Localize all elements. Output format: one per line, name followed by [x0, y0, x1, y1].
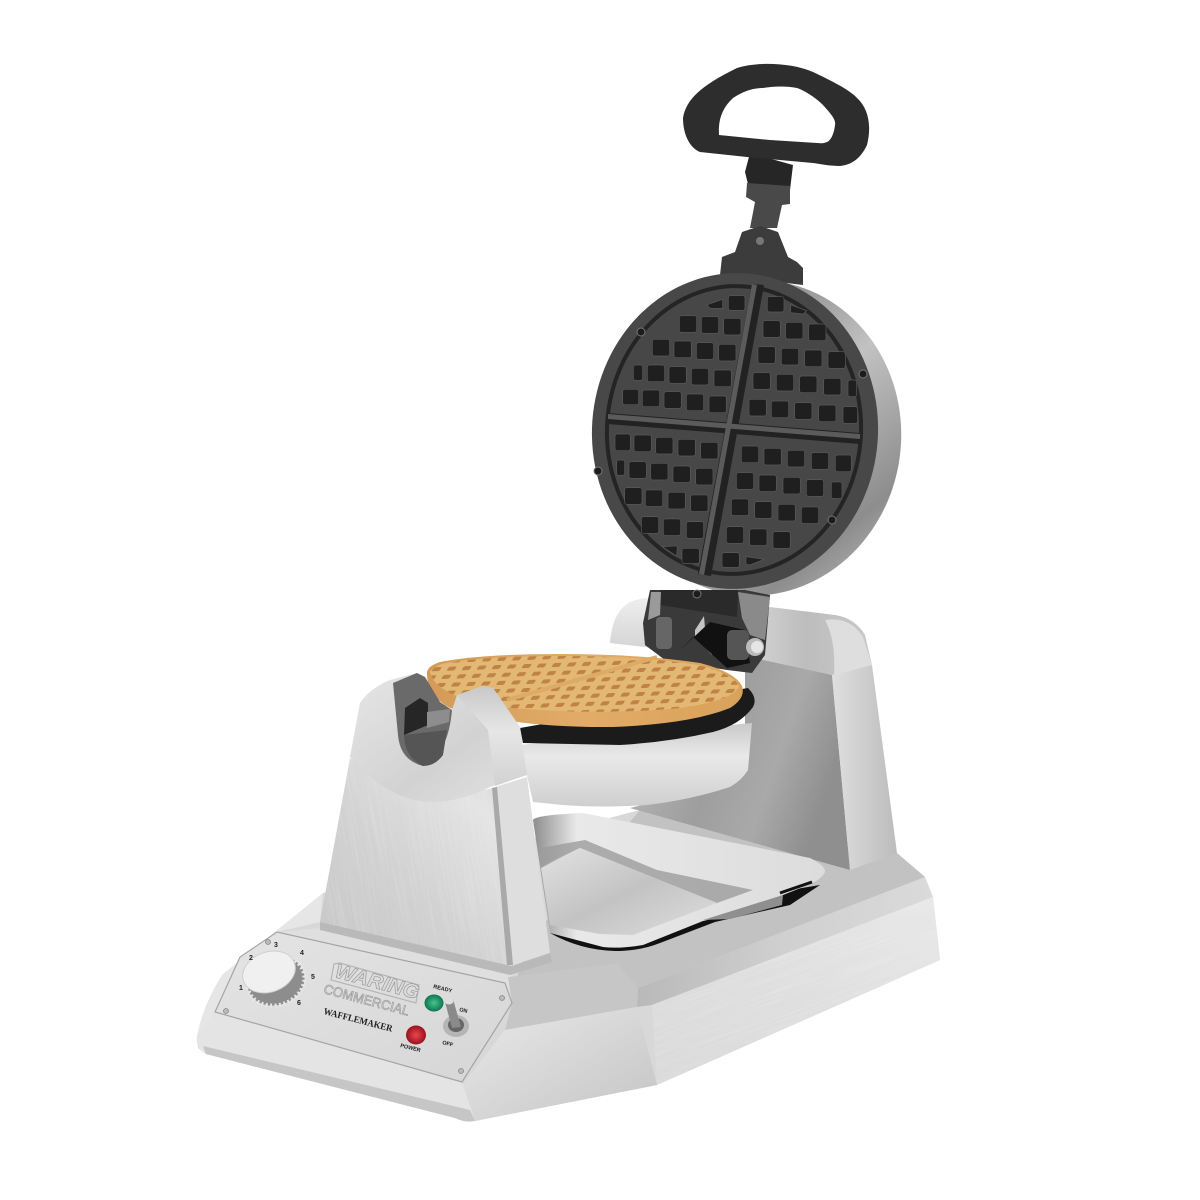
drip tray [533, 813, 825, 951]
handle neck [745, 153, 793, 190]
left tower base strip [320, 922, 552, 975]
tray inner wall [540, 840, 753, 903]
cross ribs [608, 284, 860, 576]
waffle top [430, 656, 739, 712]
dial numbers: 2 [249, 955, 253, 962]
lower cooking pan [520, 688, 755, 806]
power label: POWER [400, 1043, 421, 1054]
right tower side face [832, 665, 897, 870]
base front lip [197, 1012, 475, 1122]
COMMERCIAL wordmark: COMMERCIAL [322, 981, 412, 1019]
right tower cap [740, 606, 872, 675]
logo frame [331, 963, 419, 1003]
dial numbers: 5 [311, 974, 315, 981]
waffle [427, 654, 743, 727]
left tower lower face [320, 758, 507, 965]
left tower side face [492, 777, 550, 966]
pan rim [520, 688, 755, 745]
dial numbers [239, 942, 315, 1007]
handle arm [746, 183, 790, 228]
waffle grid plate [581, 263, 889, 599]
base corner facet [462, 1007, 657, 1121]
toggle switch [443, 998, 469, 1037]
handle grip [683, 64, 869, 166]
power light [406, 1026, 426, 1044]
lid back shell [588, 261, 922, 615]
logo [322, 961, 421, 1019]
waffle score lines [507, 657, 657, 700]
right tower [610, 598, 897, 870]
base long right face [652, 897, 940, 1085]
panel plate [215, 932, 512, 1082]
ready light [424, 994, 444, 1012]
long face brushed texture [523, 777, 1067, 1200]
base silhouette [197, 810, 940, 1121]
base left front shoulder [197, 893, 323, 1036]
plate floor [599, 280, 869, 580]
knob knurled side [241, 949, 311, 1013]
off label: OFF [442, 1040, 454, 1049]
left tower cap highlight [457, 686, 527, 786]
handle [683, 64, 869, 285]
waffle squares [615, 296, 858, 567]
wafflemaker base [196, 810, 940, 1122]
plate groove [595, 275, 873, 585]
tray rim [533, 813, 825, 948]
on label: ON [459, 1007, 468, 1015]
dial numbers: 4 [300, 950, 304, 957]
hinge assembly [643, 590, 770, 673]
control panel [215, 932, 512, 1082]
base grey strip [505, 963, 638, 1030]
plate rim [581, 263, 889, 599]
left tower cap [350, 673, 527, 802]
tray handle [703, 895, 783, 920]
right tower cap left shoulder [610, 598, 670, 650]
waffle body [427, 654, 743, 727]
base long face chamfer [637, 877, 933, 1007]
dial numbers: 1 [239, 985, 243, 992]
dial numbers: 6 [297, 1000, 301, 1007]
lid bracket [720, 226, 803, 285]
knob top [237, 944, 301, 1000]
left tower brushed texture [296, 706, 534, 1024]
right tower main face [630, 650, 850, 870]
panel surround [215, 928, 517, 1082]
plate screws [594, 328, 867, 598]
tray shadow [550, 885, 820, 951]
temperature knob [237, 944, 311, 1013]
tray floor [541, 848, 717, 935]
product name: WAFFLEMAKER [322, 1007, 394, 1035]
left tower [320, 673, 552, 975]
pan cylinder [520, 723, 752, 806]
ready label: READY [433, 984, 453, 995]
left tower notch [393, 673, 452, 766]
WARING wordmark: WARING [333, 961, 421, 1004]
panel screws [224, 940, 504, 1074]
dial numbers: 3 [274, 942, 278, 949]
base top surface [517, 810, 925, 988]
